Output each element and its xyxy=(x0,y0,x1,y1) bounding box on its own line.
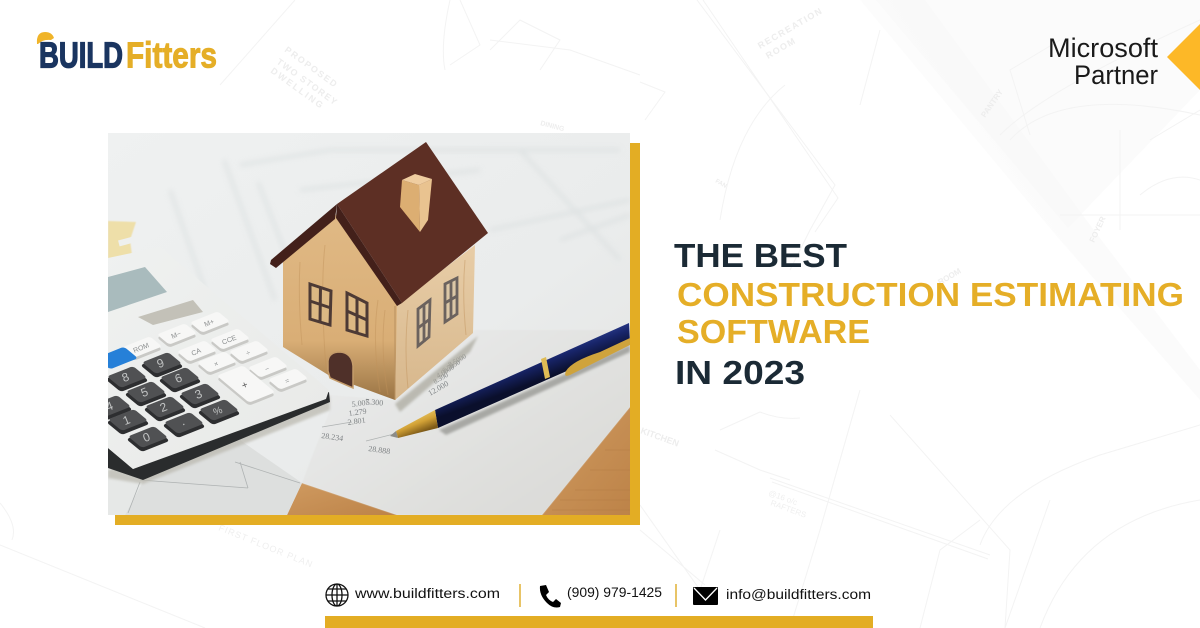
handwritten figures: 5.005 xyxy=(351,398,370,409)
title: CONSTRUCTION ESTIMATING xyxy=(677,276,1184,313)
handwritten figures: 8.5000 xyxy=(447,352,468,369)
calculator keys: 4 xyxy=(104,398,116,414)
blueprint background: TWO STOREY xyxy=(275,57,339,107)
calculator keys: × xyxy=(213,361,220,369)
blueprint background: PANTRY xyxy=(979,87,1005,119)
calculator keys: CA xyxy=(191,347,203,358)
title: IN 2023 xyxy=(675,354,805,391)
icon: hard hat xyxy=(37,32,54,44)
icon: globe xyxy=(326,584,348,606)
calculator keys: CCE xyxy=(221,334,238,347)
calculator keys: M− xyxy=(171,331,182,341)
calculator keys: = xyxy=(284,378,291,386)
paper under pen and wood xyxy=(287,483,397,515)
handwritten figures: 7.300 xyxy=(365,397,384,408)
website: www.buildfitters.com xyxy=(354,586,500,601)
handwritten figures: 8.390 xyxy=(432,371,450,386)
phone number: (909) 979-1425 xyxy=(567,585,662,600)
windows xyxy=(310,284,367,336)
yellow footer bar xyxy=(325,616,873,628)
handwritten figures xyxy=(321,352,468,456)
calculator keys xyxy=(108,312,307,452)
icon: envelope xyxy=(693,587,718,605)
footer contact strip xyxy=(325,584,873,628)
blueprint background: ROOM xyxy=(764,36,797,61)
calculator keys: % xyxy=(212,405,224,418)
blueprint background: ROOM xyxy=(936,266,963,287)
handwritten figures: 2.801 xyxy=(347,416,366,427)
blurred plan lines xyxy=(520,150,594,230)
blueprint background: PROPOSED xyxy=(283,45,339,89)
door xyxy=(328,352,353,388)
calculator keys: 0 xyxy=(141,429,153,445)
yellow plan corner xyxy=(108,221,136,260)
handwritten figures: 12.000 xyxy=(426,379,450,398)
blueprint background: DWELLING xyxy=(269,66,325,110)
blueprint background: @16 o/c xyxy=(767,488,799,507)
pen xyxy=(390,323,630,438)
Microsoft Partner badge: Microsoft xyxy=(1048,33,1158,63)
calculator keys: 2 xyxy=(158,399,170,415)
handwritten figures: 6.7050 xyxy=(441,358,462,375)
calculator keys: 5 xyxy=(139,384,151,400)
logo: BuildFitters xyxy=(37,32,217,76)
photo: house, calculator, pen on blueprints xyxy=(89,133,630,515)
blueprint background: FOYER xyxy=(1088,215,1108,244)
Microsoft Partner badge: Partner xyxy=(1074,60,1158,90)
title xyxy=(674,237,1184,391)
calculator keys: ROM xyxy=(133,342,150,355)
calculator keys: 6 xyxy=(173,370,185,386)
calculator keys: 8 xyxy=(120,369,132,385)
logo: BuildFitters: Fitters xyxy=(126,34,217,76)
blueprint background: FIRST FLOOR PLAN xyxy=(217,523,314,569)
chimney xyxy=(400,180,420,232)
calculator keys: M+ xyxy=(204,319,215,329)
handwritten figures: 28.888 xyxy=(368,444,391,456)
logo: BuildFitters: BUILD xyxy=(39,34,123,76)
calculator keys: ÷ xyxy=(245,350,252,358)
house model xyxy=(270,142,488,412)
wood grain xyxy=(299,245,466,395)
blueprint background: KITCHEN xyxy=(639,425,680,449)
Microsoft Partner badge xyxy=(1048,24,1200,90)
handwritten figures: 4.6000 xyxy=(435,363,456,380)
calculator keys: 9 xyxy=(155,355,167,371)
blueprint background: DINING xyxy=(539,120,565,133)
handwritten figures: 28.234 xyxy=(321,431,344,443)
email: info@buildfitters.com xyxy=(726,587,871,602)
roof xyxy=(337,142,488,303)
calculator keys: 3 xyxy=(193,386,205,402)
icon: phone xyxy=(540,585,561,608)
calculator keys: . xyxy=(178,414,187,428)
yellow photo frame xyxy=(115,143,640,525)
handwritten figures: 1.279 xyxy=(348,407,367,418)
calculator xyxy=(89,247,330,484)
calculator keys: + xyxy=(240,379,250,392)
calculator keys: 1 xyxy=(121,412,133,428)
calculator keys: − xyxy=(264,366,271,374)
title: THE BEST xyxy=(674,237,847,274)
blueprint background: RAFTERS xyxy=(769,498,807,520)
title: SOFTWARE xyxy=(677,313,870,350)
blueprint background: RECREATION xyxy=(756,6,823,51)
blueprint background: FAN xyxy=(714,179,727,190)
icon: yellow diamond xyxy=(1167,24,1200,90)
